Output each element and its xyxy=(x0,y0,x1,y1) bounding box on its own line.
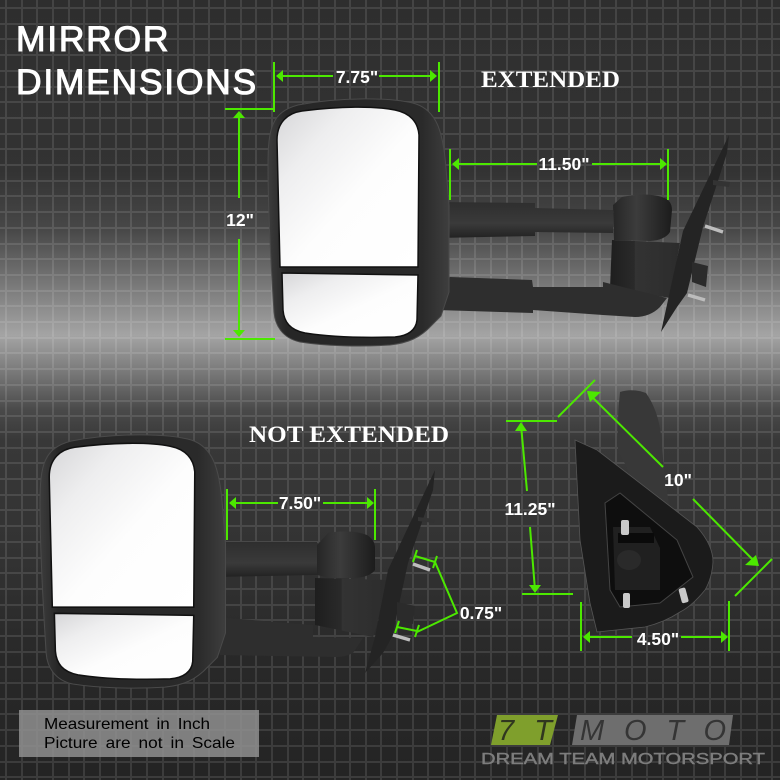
dimension: 11.50 arm extended: 11.50" xyxy=(538,154,590,174)
dimension: 0.75 bolts xyxy=(395,550,502,637)
heading: not extended: NOT EXTENDED xyxy=(249,422,449,448)
note line 1: Measurement in Inch xyxy=(44,716,210,733)
dimension: 10 diagonal: 10" xyxy=(664,470,692,490)
title: DIMENSIONS xyxy=(16,62,258,102)
bolts xyxy=(621,520,689,608)
main glass xyxy=(277,107,419,267)
mirror base housing xyxy=(610,240,680,298)
mirror head shell xyxy=(40,435,226,688)
brand logo xyxy=(481,715,766,768)
dimension: 10 diagonal xyxy=(558,380,772,596)
dimension: 4.50 width xyxy=(581,601,729,651)
tagline: DREAM TEAM MOTORSPORT xyxy=(481,751,766,768)
title: MIRROR xyxy=(16,19,170,59)
arm: upper xyxy=(437,202,613,238)
mirror base housing xyxy=(315,578,390,637)
dimension: 7.75 width: 7.75" xyxy=(336,67,378,87)
dimension: 7.75 width xyxy=(274,62,439,112)
mirror: rear side view xyxy=(575,390,713,632)
mirror: extended xyxy=(268,99,730,346)
mounting plate xyxy=(365,470,435,673)
mirror head shell xyxy=(268,99,449,346)
arm: upper xyxy=(213,542,317,577)
logo mark: 7T xyxy=(498,715,554,747)
dimension: 12 height: 12" xyxy=(226,210,254,230)
spotter glass xyxy=(282,273,418,337)
bolts xyxy=(393,564,430,640)
mounting plate xyxy=(661,135,729,332)
mirror: not extended xyxy=(40,435,435,688)
dimension: 7.50 arm xyxy=(227,489,375,540)
dimension: 4.50 width: 4.50" xyxy=(637,629,679,649)
dimension: 11.25 depth: 11.25" xyxy=(504,499,556,519)
dimension: 0.75 bolts: 0.75" xyxy=(460,603,502,623)
legend note box xyxy=(19,710,259,757)
spotter glass xyxy=(54,613,194,679)
head stalk xyxy=(618,390,669,505)
note line 2: Picture are not in Scale xyxy=(44,735,235,752)
mirror head xyxy=(40,435,226,688)
dimension: 7.50 arm: 7.50" xyxy=(279,493,321,513)
dimension: 12 height xyxy=(225,109,275,339)
heading: extended: EXTENDED xyxy=(481,67,620,93)
inner panel xyxy=(605,493,693,607)
pivot cap xyxy=(317,531,375,578)
pivot cap xyxy=(613,194,672,241)
housing back xyxy=(575,440,713,632)
main glass xyxy=(49,443,195,607)
logo word: MOTO xyxy=(580,715,726,747)
bolts xyxy=(688,226,723,300)
dimension: 11.50 arm extended xyxy=(450,149,668,200)
arm: lower xyxy=(437,277,667,317)
arm: lower xyxy=(213,618,363,657)
dimension: 11.25 depth xyxy=(504,421,573,594)
